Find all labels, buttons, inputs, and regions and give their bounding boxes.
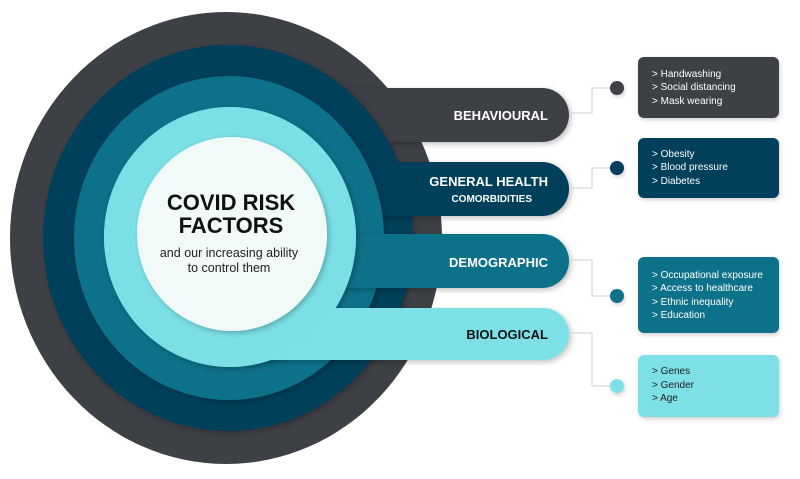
- pill labels: DEMOGRAPHIC: [449, 255, 549, 270]
- center circle: to control them: [188, 261, 270, 275]
- ring: demographic: [74, 76, 569, 400]
- center circle: [137, 137, 327, 331]
- connectors: [569, 88, 617, 386]
- ring: behavioural: [10, 12, 569, 464]
- pill labels: GENERAL HEALTH: [429, 174, 548, 189]
- box: general health list: > Blood pressure: [652, 162, 728, 173]
- pill labels: BEHAVIOURAL: [454, 108, 548, 123]
- title: COVID RISK: [167, 190, 295, 215]
- subtitle: and our increasing ability: [160, 246, 299, 260]
- box: behavioural list: > Mask wearing: [652, 96, 722, 107]
- pill labels: BIOLOGICAL: [466, 327, 548, 342]
- box: general health list: [638, 138, 779, 198]
- box: demographic list: [638, 257, 779, 333]
- box: behavioural list: > Social distancing: [652, 82, 736, 93]
- box: demographic list: > Ethnic inequality: [652, 297, 733, 308]
- dots: [610, 81, 624, 393]
- pill labels: COMORBIDITIES: [451, 194, 532, 205]
- box: biological list: [638, 355, 779, 417]
- box: demographic list: > Occupational exposure: [652, 270, 763, 281]
- box: biological list: > Age: [652, 393, 678, 404]
- box: behavioural list: > Handwashing: [652, 69, 721, 80]
- box: general health list: > Obesity: [652, 149, 695, 160]
- box: demographic list: > Education: [652, 310, 705, 321]
- box: demographic list: > Access to healthcare: [652, 283, 753, 294]
- box: biological list: > Gender: [652, 380, 695, 391]
- center circle: FACTORS: [179, 213, 283, 238]
- ring: biological: [104, 107, 569, 367]
- pill labels: [429, 108, 549, 342]
- box: general health list: > Diabetes: [652, 176, 700, 187]
- box: biological list: > Genes: [652, 366, 690, 377]
- ring: general health: [43, 45, 569, 431]
- box: behavioural list: [638, 57, 779, 118]
